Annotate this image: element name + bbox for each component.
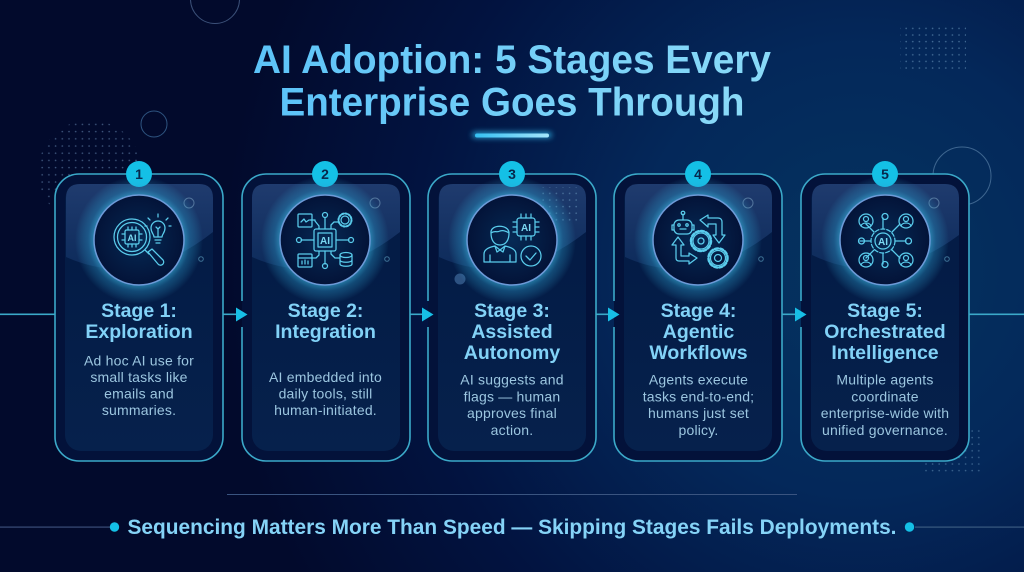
- badge 5: [872, 161, 898, 187]
- icon: person with AI chip and check: [448, 176, 576, 304]
- badge 4: [685, 161, 711, 187]
- stage 1 description: summaries.: [102, 402, 176, 418]
- badge 1: [126, 161, 152, 187]
- stage 2 heading: Stage 2:: [288, 300, 363, 322]
- icon: robot, gears and arrows: [634, 176, 762, 304]
- stage 2 description: AI embedded into: [269, 369, 382, 385]
- stage 4 heading: Agentic: [663, 321, 734, 343]
- stage 5 description: coordinate: [851, 388, 919, 404]
- stage 3 heading: Stage 3:: [474, 300, 550, 322]
- arrow 1 to 2: [223, 308, 248, 322]
- icon: person with AI chip and check: AI: [521, 223, 531, 234]
- stage 2 heading: Integration: [275, 321, 376, 343]
- stage 3 heading: Autonomy: [464, 342, 560, 364]
- dot grid top right: [900, 27, 966, 70]
- arrow 2 to 3: [410, 308, 434, 322]
- badge 4: 4: [694, 166, 702, 182]
- stage 5 description: enterprise-wide with: [821, 405, 949, 421]
- stage 3 description: AI suggests and: [460, 372, 564, 388]
- stage 5 heading: Stage 5:: [847, 300, 923, 322]
- badge 3: [499, 161, 525, 187]
- connector right: [969, 314, 1024, 315]
- badge 5: 5: [881, 166, 889, 182]
- stage 4 description: tasks end-to-end;: [643, 388, 754, 404]
- title: [253, 38, 772, 124]
- stage 5 description: unified governance.: [822, 422, 948, 438]
- stage 2 description: daily tools, still: [279, 386, 372, 402]
- panel: stage 4: [614, 161, 782, 461]
- panel: stage 5: [801, 161, 969, 461]
- badge 2: 2: [321, 166, 329, 182]
- stage 3 description: action.: [491, 422, 533, 438]
- title underline: [472, 132, 552, 138]
- decorative circle top: [190, 0, 240, 24]
- decorative circle left: [141, 111, 167, 137]
- arrow 3 to 4: [596, 308, 620, 322]
- badge 3: 3: [508, 166, 516, 182]
- icon: magnifier with AI chip and light bulb: [75, 176, 203, 304]
- stage 4 description: humans just set: [648, 405, 749, 421]
- footer takeaway: Sequencing Matters More Than Speed — Skipping Stages Fails Deployments.: [128, 516, 896, 539]
- icon: magnifier with AI chip and light bulb: AI: [128, 233, 136, 243]
- footer rule left: [0, 522, 119, 532]
- stage 3 heading: Assisted: [471, 321, 553, 343]
- stage 5 description: Multiple agents: [836, 372, 934, 388]
- stage 1 description: Ad hoc AI use for: [84, 352, 194, 368]
- decorative circle right: [933, 147, 991, 205]
- icon: AI chip network: AI: [320, 236, 330, 247]
- icon: AI chip network: [261, 176, 389, 304]
- stage 5 heading: Orchestrated: [824, 321, 946, 343]
- dot grid bottom right: [925, 428, 981, 474]
- stage 4 description: Agents execute: [649, 372, 748, 388]
- connector left: [0, 314, 55, 315]
- stage 1 heading: Exploration: [85, 321, 193, 343]
- icon: orchestrated agent network: [821, 176, 949, 304]
- stage 2 description: human-initiated.: [274, 402, 377, 418]
- badge 2: [312, 161, 338, 187]
- stage 3 description: flags — human: [464, 388, 560, 404]
- icon: orchestrated agent network: AI: [878, 237, 888, 248]
- panel: stage 1: [55, 161, 223, 461]
- panel: stage 2: [242, 161, 410, 461]
- stage 1 heading: Stage 1:: [101, 300, 177, 322]
- stage 5 heading: Intelligence: [831, 342, 939, 364]
- badge 1: 1: [135, 166, 143, 182]
- panel: stage 3: [428, 161, 596, 461]
- footer rule right: [905, 522, 1024, 532]
- stage 4 heading: Stage 4:: [661, 300, 736, 322]
- title: AI Adoption: 5 Stages Every: [253, 38, 772, 82]
- stage 3 description: approves final: [467, 405, 557, 421]
- stage 1 description: emails and: [104, 386, 174, 402]
- arrow 4 to 5: [782, 308, 806, 322]
- dot grid left: [38, 120, 142, 224]
- stage 4 heading: Workflows: [649, 342, 748, 364]
- title: Enterprise Goes Through: [280, 80, 744, 124]
- stage 1 description: small tasks like: [90, 369, 188, 385]
- stage 4 description: policy.: [678, 422, 719, 438]
